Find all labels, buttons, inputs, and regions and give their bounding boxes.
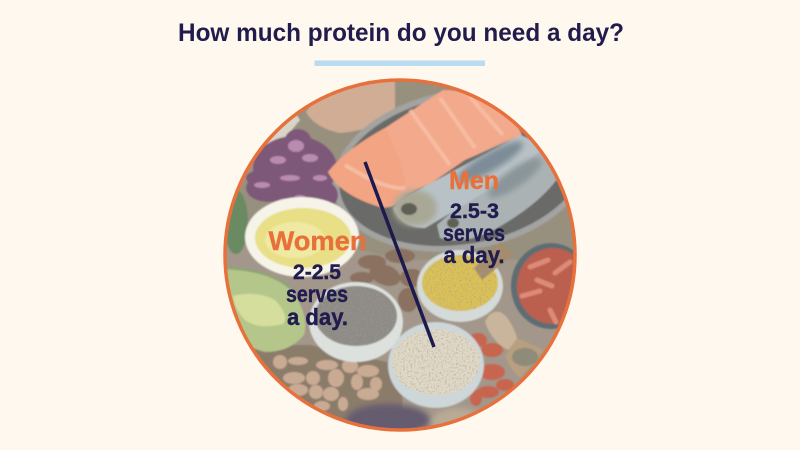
men serves: serves	[443, 220, 505, 246]
men label	[443, 167, 505, 268]
women heading: Women	[268, 226, 366, 256]
quinoa seeds	[392, 329, 480, 395]
table background	[226, 160, 557, 427]
scoop contents	[512, 348, 538, 366]
second sardine back markings	[488, 156, 542, 199]
men heading: Men	[449, 167, 499, 195]
chia seeds	[315, 286, 397, 346]
avocado	[224, 268, 305, 352]
women label	[268, 226, 366, 330]
herb highlights	[254, 140, 327, 201]
bean pile right	[350, 249, 424, 312]
wooden scoop handle	[485, 312, 518, 350]
yellow bowl glass	[417, 250, 503, 322]
oil surface	[255, 208, 351, 268]
title underline	[314, 60, 485, 66]
avocado skin edge	[226, 268, 290, 288]
oil highlight	[265, 222, 325, 258]
sardine back markings	[456, 138, 526, 185]
divider line	[365, 162, 434, 347]
avocado pit well	[233, 294, 285, 326]
goji bowl	[510, 242, 574, 330]
plate rim	[332, 91, 566, 252]
red goji on table	[469, 333, 514, 406]
men a day: a day.	[444, 242, 504, 268]
chia bowl glass	[309, 282, 403, 362]
sardine one	[393, 135, 542, 228]
orange ring	[225, 80, 575, 430]
beans	[273, 355, 382, 411]
yellow seeds	[422, 255, 498, 311]
goji berries	[516, 247, 574, 325]
men amount: 2.5-3	[450, 200, 499, 223]
food photo circle	[226, 82, 574, 428]
sardine two	[437, 148, 560, 240]
sardine eye one	[401, 203, 417, 215]
salmon light bands	[345, 97, 503, 188]
salmon left orange tone	[328, 128, 405, 207]
broccoli	[227, 190, 248, 254]
light table strip	[430, 407, 475, 425]
oil bowl rim	[245, 197, 359, 277]
dark dried fruit	[344, 402, 432, 428]
sardine eye two	[447, 218, 459, 228]
salmon fillet	[384, 89, 523, 208]
top table area	[225, 75, 580, 260]
bean pile ground	[254, 344, 403, 420]
purple herbs	[246, 129, 338, 210]
brown bowl	[306, 80, 395, 133]
women a day: a day.	[287, 304, 348, 330]
goji highlights	[522, 260, 570, 322]
women serves: serves	[286, 281, 348, 307]
sardine head tones	[393, 190, 437, 226]
seed texture	[315, 255, 498, 395]
women amount: 2-2.5	[293, 261, 341, 284]
pale cloth patch	[267, 115, 300, 145]
plate inner	[339, 104, 564, 246]
title: How much protein do you need a day?	[178, 19, 624, 47]
quinoa bowl glass	[388, 322, 484, 408]
wooden scoop	[505, 338, 544, 378]
wooden spoon in yellow bowl	[474, 242, 514, 280]
